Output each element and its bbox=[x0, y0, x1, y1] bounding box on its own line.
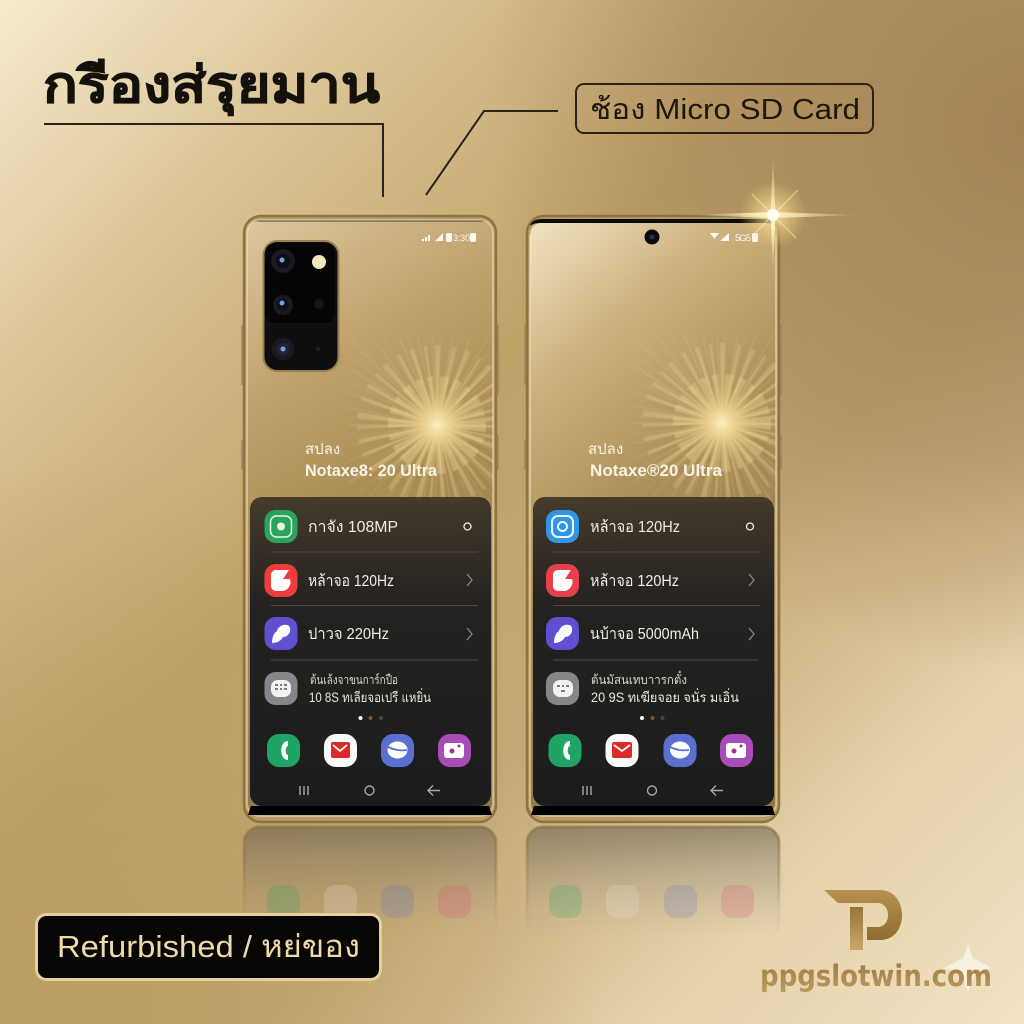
model name: Notaxe8: 20 Ultra bbox=[305, 462, 438, 480]
phone frame bbox=[527, 216, 779, 822]
divider lines bbox=[271, 552, 478, 660]
microphone dot bbox=[316, 347, 320, 351]
firework burst bbox=[357, 345, 517, 505]
lens 3 bbox=[272, 338, 294, 360]
app: gallery bbox=[438, 734, 471, 767]
row: storage description bbox=[546, 670, 739, 705]
callout leader line bbox=[426, 111, 558, 195]
row: camera bbox=[546, 510, 754, 543]
model name: สปลง bbox=[305, 441, 340, 458]
lens 1 bbox=[271, 249, 295, 273]
phone reflection: left bbox=[244, 827, 496, 939]
camera module bbox=[264, 241, 338, 371]
badge: refurbished bbox=[36, 914, 380, 980]
app: messages bbox=[664, 734, 696, 767]
title: กรีองส่รุยมาน bbox=[43, 57, 380, 116]
callout: Micro SD card slot: ช้อง Micro SD Card bbox=[590, 94, 860, 126]
dock icons bbox=[267, 734, 471, 767]
row: refresh rate: ปาวจ 220Hz bbox=[308, 626, 389, 643]
row: camera: กาจัง 108MP bbox=[308, 519, 398, 536]
burst core bbox=[689, 391, 754, 456]
screen edge highlight bbox=[530, 235, 776, 816]
row: storage description: ต้นเล้งจาขนการ์กปือ bbox=[310, 673, 398, 687]
firework burst bbox=[642, 343, 802, 503]
side buttons bbox=[525, 325, 781, 470]
row: refresh rate bbox=[264, 617, 472, 650]
divider lines bbox=[553, 552, 760, 660]
settings panel bbox=[531, 497, 775, 815]
title leader line bbox=[44, 124, 383, 197]
model name: สปลง bbox=[588, 441, 623, 458]
app: messages bbox=[381, 734, 414, 767]
model name bbox=[588, 441, 723, 480]
phone frame bbox=[244, 216, 496, 822]
app: mail bbox=[324, 734, 357, 767]
model name bbox=[305, 441, 438, 480]
logo mark bbox=[824, 890, 902, 950]
screen edge highlight bbox=[247, 220, 493, 816]
sparkle bbox=[944, 944, 992, 992]
row: storage description: ต้นมัสนเทบาารกตั๋ง bbox=[591, 670, 687, 687]
navigation bar bbox=[583, 786, 723, 796]
status bar bbox=[422, 233, 476, 243]
phone: left (rear camera view) bbox=[242, 216, 517, 822]
row: screen bbox=[546, 564, 754, 597]
status bar: 3:30 bbox=[453, 233, 470, 243]
sparkle flare on right phone corner bbox=[690, 152, 860, 272]
row: battery bbox=[546, 617, 754, 650]
app: gallery bbox=[720, 734, 753, 767]
app: phone bbox=[267, 734, 300, 767]
sensor bbox=[314, 299, 324, 309]
screen bbox=[530, 222, 802, 816]
model name: Notaxe®20 Ultra bbox=[590, 462, 723, 480]
app: mail bbox=[606, 734, 638, 767]
row: battery: นบ้าจอ 5000mAh bbox=[590, 626, 699, 643]
page dots bbox=[640, 716, 664, 720]
flash bbox=[312, 255, 326, 269]
phone: right (front view) bbox=[525, 216, 802, 822]
callout: Micro SD card slot bbox=[576, 84, 873, 133]
badge: refurbished: Refurbished / หย่ของ bbox=[57, 929, 360, 964]
status bar bbox=[710, 233, 758, 244]
row: storage description bbox=[264, 672, 431, 705]
row: screen bbox=[264, 564, 472, 597]
website text: ppgslotwin.com bbox=[760, 959, 992, 993]
row: screen: หล้าจอ 120Hz bbox=[590, 573, 679, 590]
burst core bbox=[404, 393, 469, 458]
page dots bbox=[358, 716, 383, 720]
row: camera bbox=[264, 510, 471, 543]
settings panel bbox=[248, 497, 492, 815]
dock icons bbox=[548, 734, 753, 767]
navigation bar bbox=[300, 786, 440, 796]
row: camera: หล้าจอ 120Hz bbox=[590, 519, 680, 536]
row: screen: หล้าจอ 120Hz bbox=[308, 573, 394, 590]
punch-hole camera bbox=[644, 230, 660, 244]
logo: ppgslotwin bbox=[760, 890, 992, 993]
row: storage description: 20 9S ทเฆียจอย จนั่ร มเอิ่น bbox=[591, 688, 739, 705]
app: phone bbox=[548, 734, 582, 767]
bezel strip bbox=[247, 220, 493, 222]
phone reflection: right bbox=[527, 827, 779, 939]
side buttons bbox=[242, 325, 498, 470]
status bar: 5G5 bbox=[735, 233, 751, 244]
lens 2 bbox=[273, 295, 293, 315]
row: storage description: 10 8S ทเลียจอเปรี แหยิ่น bbox=[309, 688, 431, 705]
top black bezel bbox=[530, 219, 776, 226]
screen bbox=[247, 220, 517, 816]
